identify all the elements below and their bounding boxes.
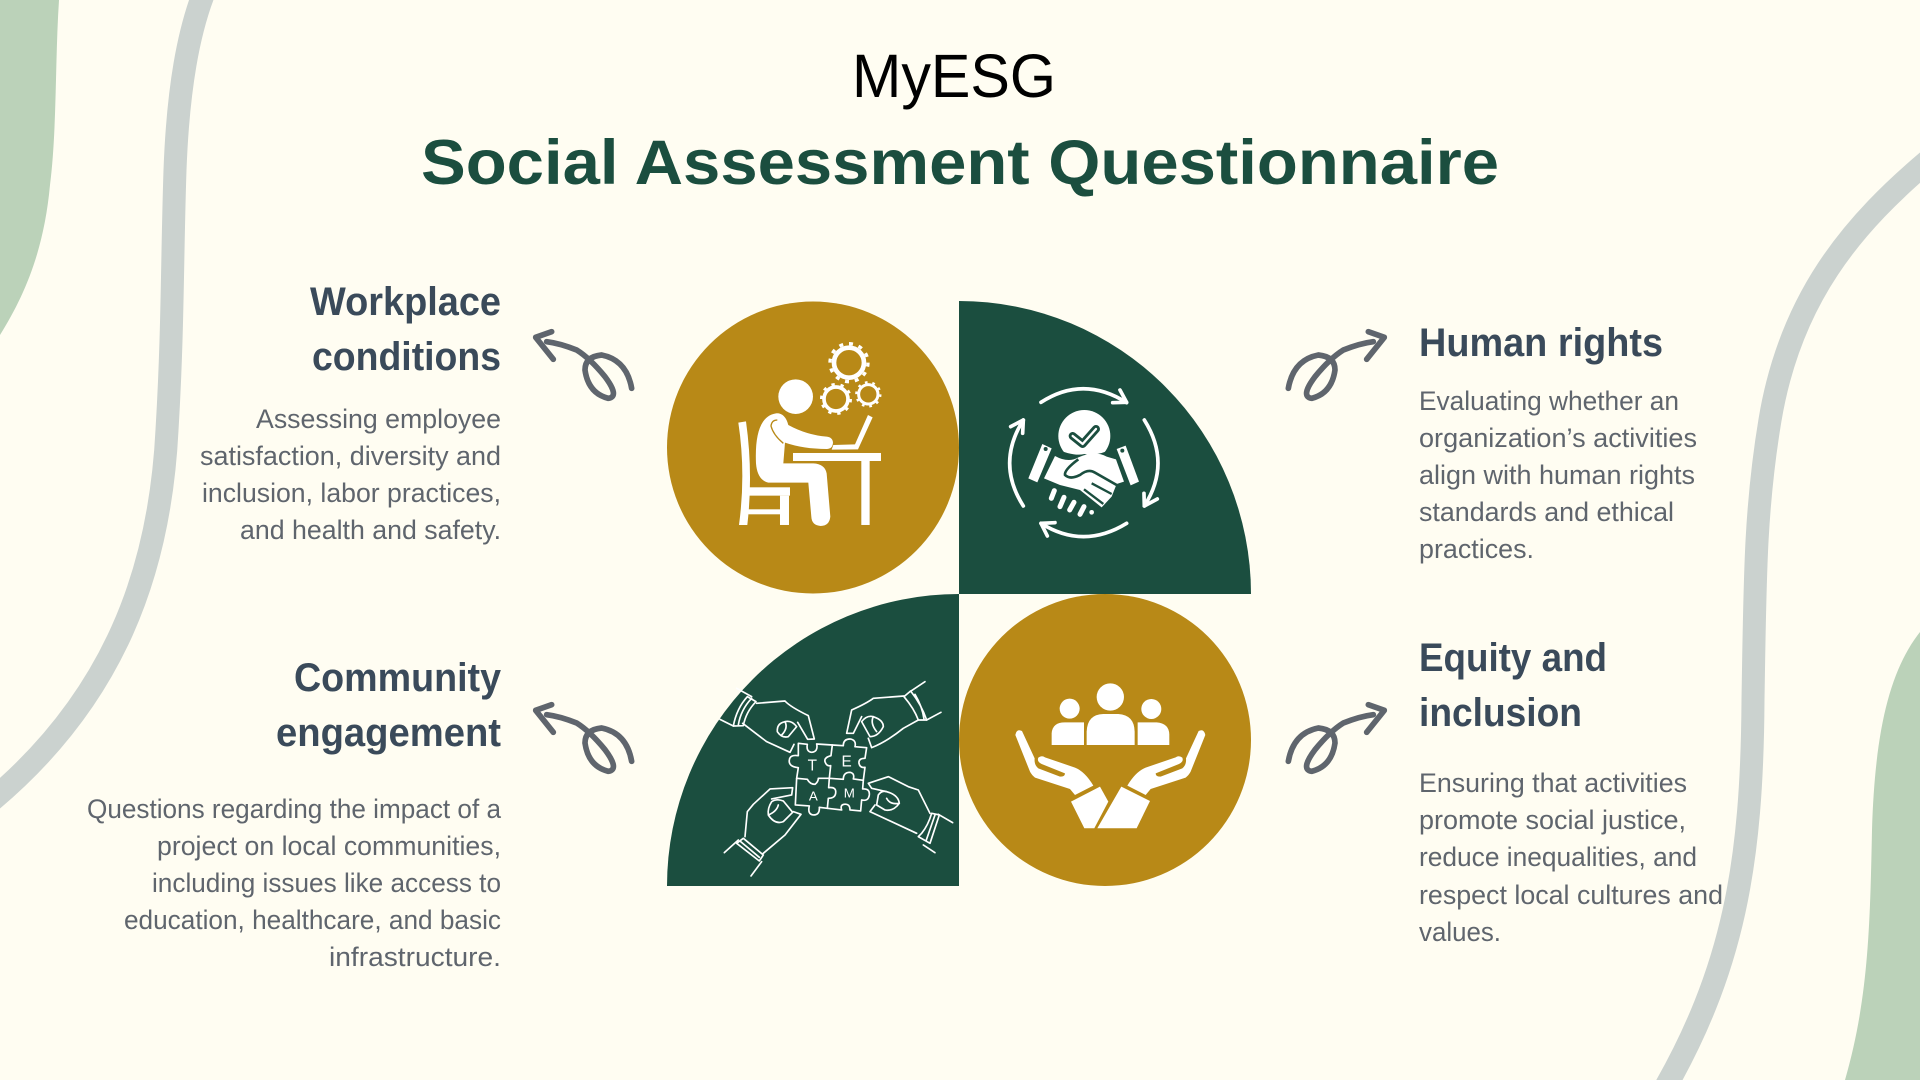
body: workplace conditions: and health and safety. (240, 515, 501, 545)
decorative blob: bottom right (1845, 632, 1920, 1080)
heading: community engagement: Community (294, 656, 502, 700)
body: human rights: organization’s activities (1419, 423, 1697, 453)
panel: community engagement text (87, 656, 502, 972)
brand name: MyESG (852, 42, 1056, 110)
arrow: workplace conditions (536, 332, 632, 398)
body: community engagement: project on local communities, (157, 831, 501, 861)
icon: hands assembling TEAM puzzle: M (844, 786, 855, 801)
arrow: equity and inclusion (1288, 705, 1384, 771)
decorative wave: right (1658, 155, 1920, 1080)
heading: equity and inclusion: inclusion (1419, 691, 1582, 735)
icon: people held in open hands (1015, 683, 1205, 828)
body: workplace conditions: inclusion, labor practices, (202, 478, 501, 508)
body: equity and inclusion (1419, 768, 1723, 947)
panel: equity circle (959, 594, 1251, 886)
body: equity and inclusion: reduce inequalities, and (1419, 842, 1697, 872)
icon: handshake with cycle arrows (1010, 389, 1158, 537)
body: community engagement: education, healthcare, and basic (124, 905, 501, 935)
body: community engagement: infrastructure. (329, 942, 501, 972)
body: community engagement (87, 794, 502, 972)
heading: equity and inclusion: Equity and (1419, 636, 1607, 680)
body: human rights (1419, 386, 1697, 564)
heading: equity and inclusion (1419, 636, 1607, 735)
body: human rights: practices. (1419, 534, 1534, 564)
heading: workplace conditions (310, 280, 501, 379)
panel: human rights text (1419, 321, 1697, 564)
body: workplace conditions: satisfaction, diversity and (200, 441, 501, 471)
body: workplace conditions: Assessing employee (256, 404, 501, 434)
heading: workplace conditions: conditions (312, 335, 501, 379)
icon: hands assembling TEAM puzzle: E (842, 754, 852, 771)
body: human rights: align with human rights (1419, 460, 1695, 490)
heading: human rights: Human rights (1419, 321, 1663, 365)
body: workplace conditions (200, 404, 501, 545)
arrow: human rights (1288, 332, 1384, 398)
body: human rights: standards and ethical (1419, 497, 1674, 527)
panel: workplace circle (667, 302, 959, 594)
icon: hands assembling TEAM puzzle (720, 682, 953, 876)
title: Social Assessment Questionnaire (421, 128, 1499, 198)
heading: community engagement (276, 656, 502, 755)
icon: hands assembling TEAM puzzle: T (808, 758, 818, 775)
icon: worker at desk with gears (738, 344, 881, 526)
body: community engagement: Questions regarding the impact of a (87, 794, 502, 824)
decorative wave: left (0, 0, 207, 806)
panel: community quarter (667, 594, 959, 886)
body: equity and inclusion: promote social justice, (1419, 805, 1686, 835)
heading: community engagement: engagement (276, 711, 501, 755)
panel: equity and inclusion text (1419, 636, 1723, 947)
arrow: community engagement (536, 705, 632, 771)
body: community engagement: including issues like access to (152, 868, 501, 898)
body: equity and inclusion: respect local cultures and (1419, 880, 1723, 910)
body: equity and inclusion: Ensuring that activities (1419, 768, 1687, 798)
heading: workplace conditions: Workplace (310, 280, 501, 324)
body: equity and inclusion: values. (1419, 917, 1501, 947)
body: human rights: Evaluating whether an (1419, 386, 1679, 416)
decorative blob: top left (0, 0, 59, 335)
icon: hands assembling TEAM puzzle: A (809, 789, 818, 804)
panel: workplace conditions text (200, 280, 501, 545)
panel: human rights quarter (959, 301, 1251, 594)
